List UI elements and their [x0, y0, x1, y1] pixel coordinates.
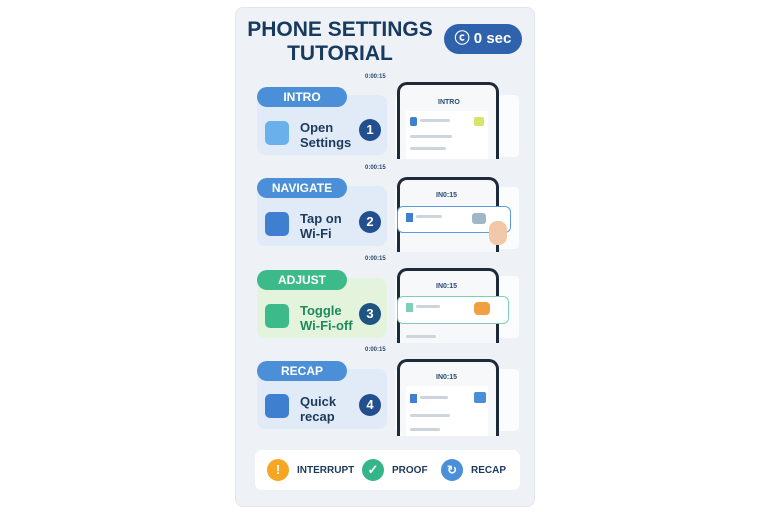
step panel — [257, 186, 387, 246]
phone mockup — [395, 359, 519, 436]
card background — [235, 7, 535, 507]
legend: recap: RECAP — [471, 465, 506, 476]
legend: recap — [441, 459, 506, 481]
number badge — [359, 303, 381, 325]
legend: interrupt: ! — [276, 462, 280, 477]
phone mockup: IN0:15 — [436, 192, 457, 199]
label pill — [257, 87, 347, 107]
legend: interrupt — [267, 459, 354, 481]
label pill: RECAP — [281, 364, 323, 378]
step 1 — [257, 74, 519, 159]
step panel: Wi-Fi-off — [300, 318, 353, 333]
caption: 0:00:15 — [365, 165, 386, 171]
phone mockup: INTRO — [438, 99, 460, 106]
step panel: Quick — [300, 394, 336, 409]
step panel: Tap on — [300, 211, 342, 226]
label pill: INTRO — [283, 90, 321, 104]
label pill — [257, 270, 347, 290]
title: TUTORIAL — [287, 42, 393, 65]
legend: interrupt: INTERRUPT — [297, 465, 354, 476]
phone mockup — [395, 268, 519, 343]
legend: proof: ✓ — [368, 462, 378, 477]
caption: 0:00:15 — [365, 74, 386, 80]
number badge — [359, 394, 381, 416]
step panel: Wi-Fi — [300, 226, 332, 241]
number badge — [359, 119, 381, 141]
label pill: NAVIGATE — [272, 181, 332, 195]
phone mockup — [395, 82, 519, 159]
legend: recap: ↻ — [447, 463, 457, 477]
timer badge — [444, 24, 522, 54]
step panel — [257, 369, 387, 429]
number badge: 3 — [366, 306, 374, 321]
phone mockup: IN0:15 — [436, 374, 457, 381]
step panel — [257, 95, 387, 155]
step 2 — [257, 164, 519, 252]
number badge — [359, 211, 381, 233]
legend bar — [255, 450, 520, 490]
timer badge: ⓒ 0 sec — [455, 30, 511, 47]
step panel: recap — [300, 409, 335, 424]
step panel: Open — [300, 120, 333, 135]
caption: 0:00:15 — [365, 256, 386, 262]
label pill — [257, 361, 347, 381]
step 4 — [257, 346, 519, 436]
title: PHONE SETTINGS — [247, 18, 433, 41]
title — [247, 18, 433, 65]
caption: 0:00:15 — [365, 347, 386, 353]
number badge: 1 — [366, 122, 374, 137]
number badge: 2 — [366, 214, 374, 229]
phone mockup — [395, 177, 519, 252]
step panel: Toggle — [300, 303, 342, 318]
label pill — [257, 178, 347, 198]
step panel — [257, 278, 387, 338]
phone mockup: IN0:15 — [436, 283, 457, 290]
legend: proof: PROOF — [392, 465, 428, 476]
label pill: ADJUST — [278, 273, 326, 287]
step panel: Settings — [300, 135, 351, 150]
legend: proof — [362, 459, 428, 481]
step 3 — [257, 256, 519, 343]
number badge: 4 — [366, 397, 374, 412]
